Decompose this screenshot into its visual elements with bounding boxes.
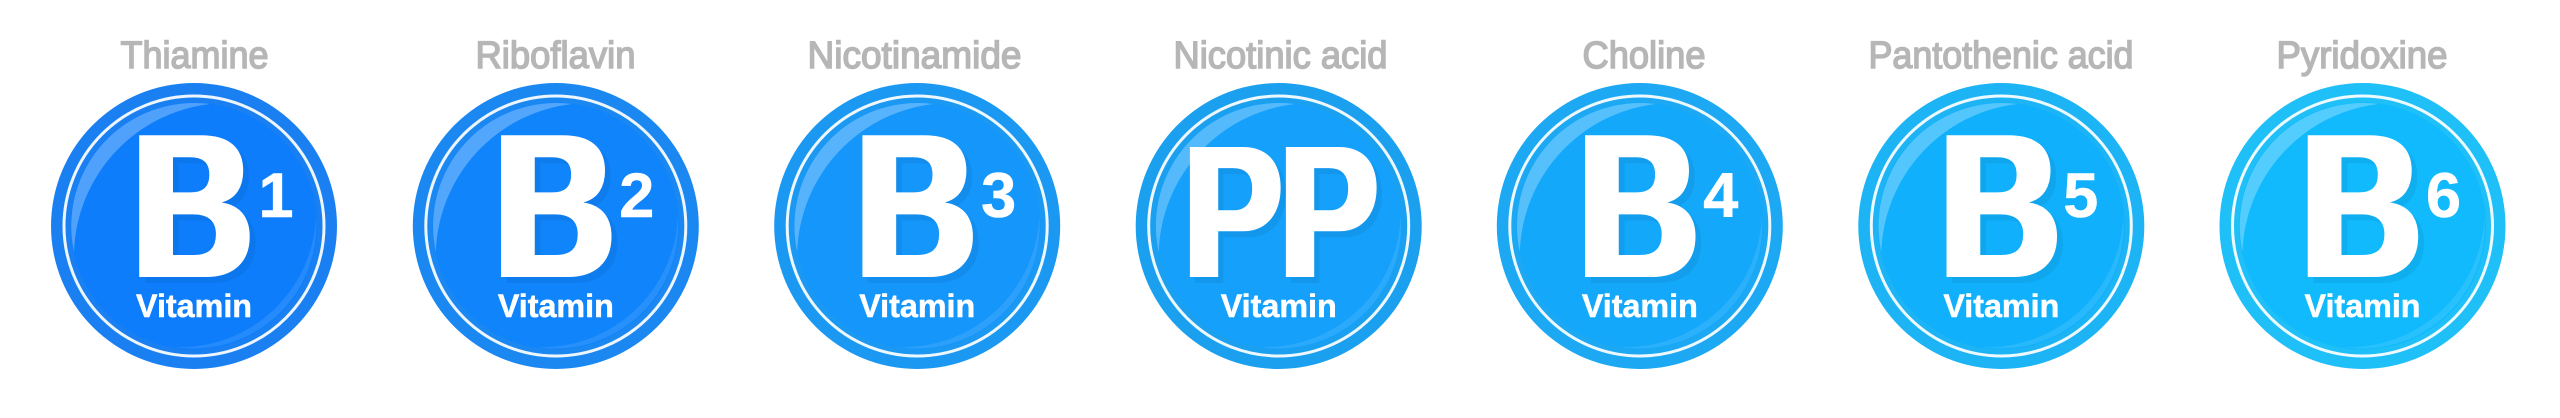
icon: PP circle: PP: [1183, 106, 1378, 317]
label: Choline: Choline: [1582, 35, 1706, 77]
icon: B3 circle: Vitamin: [859, 288, 975, 324]
icon: B1 circle: Vitamin: [136, 288, 252, 324]
icon: B2 circle: Vitamin: [498, 288, 614, 324]
icon: B4 circle: B: [1579, 90, 1698, 321]
icon: B5 circle: B: [1941, 90, 2060, 321]
badge: Riboflavin B2: [413, 35, 699, 369]
icon: B5 circle: Vitamin: [1943, 288, 2059, 324]
icon: B3 circle: B: [862, 96, 981, 327]
badge: Nicotinic acid PP: [1136, 35, 1422, 369]
badge: Pyridoxine B6: [2220, 35, 2506, 369]
label: Pyridoxine: Pyridoxine: [2276, 35, 2448, 77]
icon: B2 circle: B: [495, 90, 614, 321]
icon: B6 circle: [2220, 83, 2506, 369]
label: Pantothenic acid: Pantothenic acid: [1868, 35, 2134, 77]
icon: PP circle: PP: [1189, 112, 1383, 323]
badge: Thiamine B1: [51, 35, 337, 369]
icon: B1 circle: 1: [258, 161, 294, 231]
icon: B1 circle: B: [139, 96, 258, 327]
icon: B2 circle: B: [501, 96, 620, 327]
icon: B6 circle: 6: [2426, 161, 2461, 231]
icon: B5 circle: B: [1946, 96, 2065, 327]
icon: B2 circle: 2: [619, 161, 654, 231]
icon: PP circle: Vitamin: [1221, 288, 1337, 324]
icon: B4 circle: 4: [1703, 161, 1738, 231]
label: Thiamine: Thiamine: [120, 35, 268, 77]
badge: Choline B4: [1497, 35, 1783, 369]
icon: B4 circle: Vitamin: [1582, 288, 1698, 324]
icon: PP circle: [1136, 83, 1422, 369]
badge: Nicotinamide B3: [774, 35, 1060, 369]
icon: B2 circle: [413, 83, 699, 369]
label: Riboflavin: Riboflavin: [476, 35, 636, 77]
badge: Pantothenic acid B5: [1858, 35, 2144, 369]
icon: B5 circle: [1858, 83, 2144, 369]
icon: B3 circle: [774, 83, 1060, 369]
icon: B4 circle: B: [1585, 96, 1704, 327]
icon: B3 circle: 3: [981, 161, 1016, 231]
label: Nicotinic acid: Nicotinic acid: [1174, 35, 1388, 77]
icon: B3 circle: B: [856, 90, 975, 321]
icon: B1 circle: B: [133, 90, 252, 321]
icon: B4 circle: [1497, 83, 1783, 369]
icon: B5 circle: 5: [2063, 161, 2098, 231]
icon: B6 circle: Vitamin: [2305, 288, 2420, 324]
icon: B6 circle: B: [2308, 96, 2427, 327]
icon: B1 circle: [51, 83, 337, 369]
label: Nicotinamide: Nicotinamide: [808, 35, 1022, 77]
icon: B6 circle: B: [2302, 90, 2421, 321]
